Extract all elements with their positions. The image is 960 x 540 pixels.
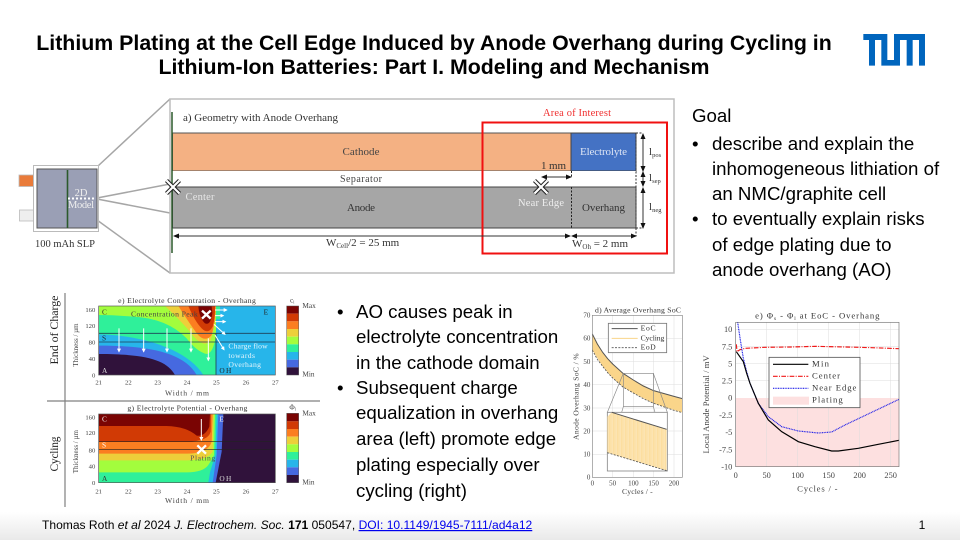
axis labels: 24 [184,488,191,495]
dimension labels: Oh [582,243,591,251]
axis labels: 40 [583,381,591,389]
near edge curve [738,322,899,433]
dimension labels: 1 mm [541,160,566,172]
EoC curve [592,334,682,399]
text block: mechanism bullets: cycling (right) [356,480,467,501]
colorbar [287,402,316,486]
axis labels: 200 [853,471,866,480]
chart: electrolyte concentration [72,295,316,398]
colorbar: Min [302,370,315,379]
arrow to plating site [200,419,203,440]
axis labels: 200 [669,479,680,487]
panel frame [170,99,674,273]
electrolyte: Electrolyte [580,146,627,158]
domain labels [102,307,269,375]
axis labels: 2.5 [722,377,732,386]
domain labels: A [102,474,108,483]
domain labels: S [102,334,106,343]
legend: Plating [812,395,843,405]
domain labels: OH [219,366,232,375]
diagram: pouch cell [19,99,170,273]
axis labels: 26 [243,488,250,495]
colorbar: Min [302,477,315,486]
text block: goal: anode overhang (AO) [712,259,891,280]
separator [172,171,636,187]
axis labels: 10 [583,451,591,459]
dimension labels: /2 = 25 mm [348,237,400,249]
axis labels: 0 [734,471,738,480]
axis labels: Local Anode Potential / mV [701,354,711,453]
cell labels: Model [68,200,94,211]
anode [172,171,636,228]
panel heading: a) Geometry with Anode Overhang [183,112,338,124]
axis labels: 25 [213,488,220,495]
axis labels: 160 [85,415,96,422]
axis labels: Cycles / - [797,483,838,493]
annotations: Concentration Peak [131,309,198,318]
axis labels: 80 [89,447,96,454]
title: Lithium Plating at the Cell Edge Induced by Anode Overhang during Cycling in [36,31,832,55]
axis labels: 27 [272,488,279,495]
current collector line [171,112,173,253]
cross marker: center [166,180,180,194]
zoom guide [607,373,667,412]
axis labels: -2.5 [719,411,732,420]
domain labels: C [102,415,107,424]
chart title: at EoC - Overhang [797,311,880,321]
annotations: Charge flow [228,342,268,351]
cathode [172,133,571,171]
chart title: g) Electrolyte Potential - Overhang [127,403,248,412]
dimension labels: l [649,201,652,213]
chart title: l [794,316,796,322]
legend: Center [812,371,840,381]
chart title: d) Average Overhang SoC [595,306,681,315]
axis labels: Cycles / - [622,487,653,496]
text block: goal: • [692,208,699,229]
text block: goal: • [692,133,699,154]
text block: mechanism bullets: in the cathode domain [356,352,540,373]
peak cross marker [202,311,211,319]
anode: Center [186,192,215,203]
text block: goal: of edge plating due to [712,234,891,255]
dimension labels: l [649,146,652,158]
dimension labels: W [572,238,582,250]
plot frame [736,322,899,467]
dimension labels: = 2 mm [591,238,628,250]
text block: goal: an NMC/graphite cell [712,183,886,204]
axis labels: 0 [92,372,96,379]
axis labels: 24 [184,380,191,387]
axis labels: 60 [583,335,591,343]
text block: goal [692,105,940,280]
axis labels: 0 [591,479,595,487]
plating region [736,398,899,467]
inset [607,412,667,471]
axis labels: 27 [272,380,279,387]
axis labels: 150 [648,479,659,487]
cell labels: 100 mAh SLP [35,239,95,250]
text block: mechanism bullets: AO causes peak in [356,301,513,322]
chart title: - Φ [777,311,794,321]
row and column dividers [47,293,320,507]
anode: Overhang [582,202,626,214]
cathode: Cathode [342,146,380,158]
legend: Cycling [641,333,665,342]
axis labels: 21 [95,488,102,495]
separator: Separator [340,174,383,185]
colorbar: Φ [289,402,295,411]
text block: goal: inhomogeneous lithiation of [712,158,940,179]
chart: local anode potential [701,311,899,493]
axis labels: 5 [728,359,732,368]
contour field [99,306,275,375]
text block: mechanism bullets: Subsequent charge [356,377,518,398]
domain labels: E [264,307,269,316]
legend: EoC [641,324,656,333]
dimension labels [326,146,662,251]
colorbar [287,295,316,379]
colorbar: Max [302,409,316,418]
axis labels: 23 [154,488,162,495]
cell tabs [19,175,38,221]
domain labels: C [102,307,107,316]
title: Lithium-Ion Batteries: Part I. Modeling and Mechanism [158,55,710,79]
electrolyte [571,133,636,171]
axis labels: 80 [89,339,96,346]
axis labels: 0 [728,394,732,403]
cell labels [35,188,95,250]
legend: Near Edge [812,383,856,393]
axis labels: Anode Overhang SoC / % [572,353,581,440]
axis labels: 120 [85,323,96,330]
plating cross marker [197,445,206,454]
axis labels: Thickness / µm [72,323,80,367]
plating label: Plating [190,453,215,462]
axis labels: 250 [884,471,897,480]
domain labels: OH [219,474,232,483]
domain labels: S [102,441,106,450]
axis labels [701,325,897,493]
plot frame [592,315,682,477]
annotations: towards [228,351,255,360]
axis labels: 22 [125,488,132,495]
axis labels: 10 [724,325,732,334]
domain labels: A [102,366,108,375]
text block: mechanism bullets: • [337,377,344,398]
chart title: e) Electrolyte Concentration - Overhang [118,296,256,305]
anode: Near Edge [518,198,564,209]
flow arrows [119,310,227,360]
EoD curve [592,350,682,413]
text block: mechanism bullets: electrolyte concentration [356,326,558,347]
annotations: Overhang [228,360,261,369]
axis labels: 0 [587,474,591,482]
row label: cycling: Cycling [49,436,61,472]
axis labels: 30 [583,404,591,412]
axis labels: 20 [583,427,591,435]
axis labels: 100 [791,471,804,480]
area of interest box: Area of Interest [543,108,611,119]
chart: electrolyte potential [72,402,316,505]
title [36,31,832,79]
dimension labels: neg [652,207,662,214]
axis labels [72,415,279,505]
axis labels: Width / mm [165,389,209,398]
contour field [99,414,275,483]
axis labels: 25 [213,380,220,387]
annotations [131,309,268,369]
colorbar: l [293,299,295,304]
center curve [736,344,899,352]
dimension labels: W [326,237,336,249]
chart title: s [774,316,776,322]
axis labels [72,307,279,398]
axis labels: 40 [89,356,96,363]
SoC band [592,334,682,413]
dimension labels: l [649,172,652,184]
zoom lines [97,99,170,273]
axis labels: 120 [85,430,96,437]
min curve [736,352,899,451]
area of interest box [482,108,667,254]
anode: Anode [347,202,375,214]
footer bar [0,512,960,540]
axis labels: 0 [92,480,96,487]
domain labels [102,415,232,483]
axis labels: 50 [609,479,617,487]
text block: goal: to eventually explain risks [712,208,925,229]
cross marker: near edge [534,180,548,194]
text block: mechanism bullets: • [337,301,344,322]
chart title: e) Φ [755,311,773,321]
axis labels: Thickness / µm [72,429,80,473]
axis labels: 100 [628,479,639,487]
text block: goal: Goal [692,105,731,126]
plot frame [99,414,275,483]
legend: Min [812,359,830,369]
axis labels [572,312,680,496]
dimension labels: Cell [336,242,348,250]
colorbar: c [290,295,293,304]
colorbar: l [295,406,297,411]
grid [736,322,899,467]
panel: geometry with anode overhang [166,99,674,273]
cell body [34,166,98,232]
axis labels: Width / mm [165,496,209,505]
dimension arrows [174,133,643,236]
axis labels: 50 [583,358,591,366]
icon: TUM logo [863,34,925,66]
text block: mechanism bullets: equalization in overhang [356,402,558,423]
legend [769,357,860,408]
dimension labels: sep [652,178,661,185]
page number: 1 [919,518,926,532]
axis labels: 70 [583,312,591,320]
axis labels: 160 [85,307,96,314]
text block: mechanism bullets: plating especially over [356,454,540,475]
axis labels: 26 [243,380,250,387]
axis labels: 23 [154,380,162,387]
axis labels: 150 [822,471,835,480]
citation: Thomas Roth et al 2024 J. Electrochem. Soc. 171 050547, DOI: 10.1149/1945-7111/ad4a12 [42,518,533,532]
legend [608,323,667,353]
axis labels: 40 [89,463,96,470]
text block: mechanism bullets [337,301,558,501]
text block: goal: describe and explain the [712,133,914,154]
axis labels: -10 [721,462,732,471]
grid [592,315,682,477]
domain labels: E [219,415,224,424]
text block: mechanism bullets: area (left) promote edge [356,428,556,449]
colorbar: Max [302,301,316,310]
axis labels: 22 [125,380,132,387]
axis labels: 7.5 [722,342,732,351]
axis labels: 50 [763,471,771,480]
row label: end of charge: End of Charge [47,296,61,364]
cell labels: 2D [75,188,88,199]
axis labels: -5 [725,428,732,437]
chart: average overhang SoC [572,306,682,496]
dimension labels: pos [652,152,662,159]
axis labels: -7.5 [719,445,732,454]
plot frame [99,306,275,375]
legend: EoD [641,343,656,352]
axis labels: 21 [95,380,102,387]
